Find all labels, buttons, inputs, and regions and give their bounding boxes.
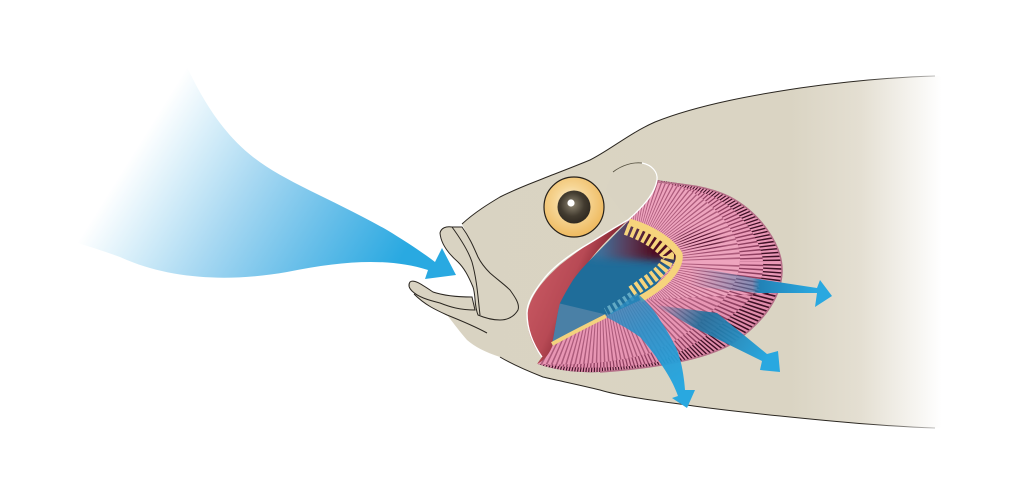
diagram: water flow through fish gills: [88, 76, 935, 428]
gill lobe: inner: [538, 180, 740, 364]
gill arch: yellow: [552, 222, 679, 344]
gill filaments: [538, 180, 783, 373]
fish body: [447, 76, 942, 428]
gill lobe: outer: [538, 180, 782, 372]
water exit arrow: bottom: [606, 293, 695, 408]
large water flow arrow: [40, 67, 456, 279]
upper lip: [440, 227, 518, 320]
operculum cover: [527, 163, 657, 357]
water exit arrow: right: [690, 266, 832, 307]
gill lobe: middle: [538, 180, 764, 368]
gill cavity: [527, 220, 676, 364]
outer rim of gill: [600, 182, 782, 372]
water exit arrow: middle: [655, 305, 780, 372]
lower jaw: [409, 281, 487, 333]
dark shading near arch: [676, 231, 724, 249]
eye: [544, 177, 604, 237]
